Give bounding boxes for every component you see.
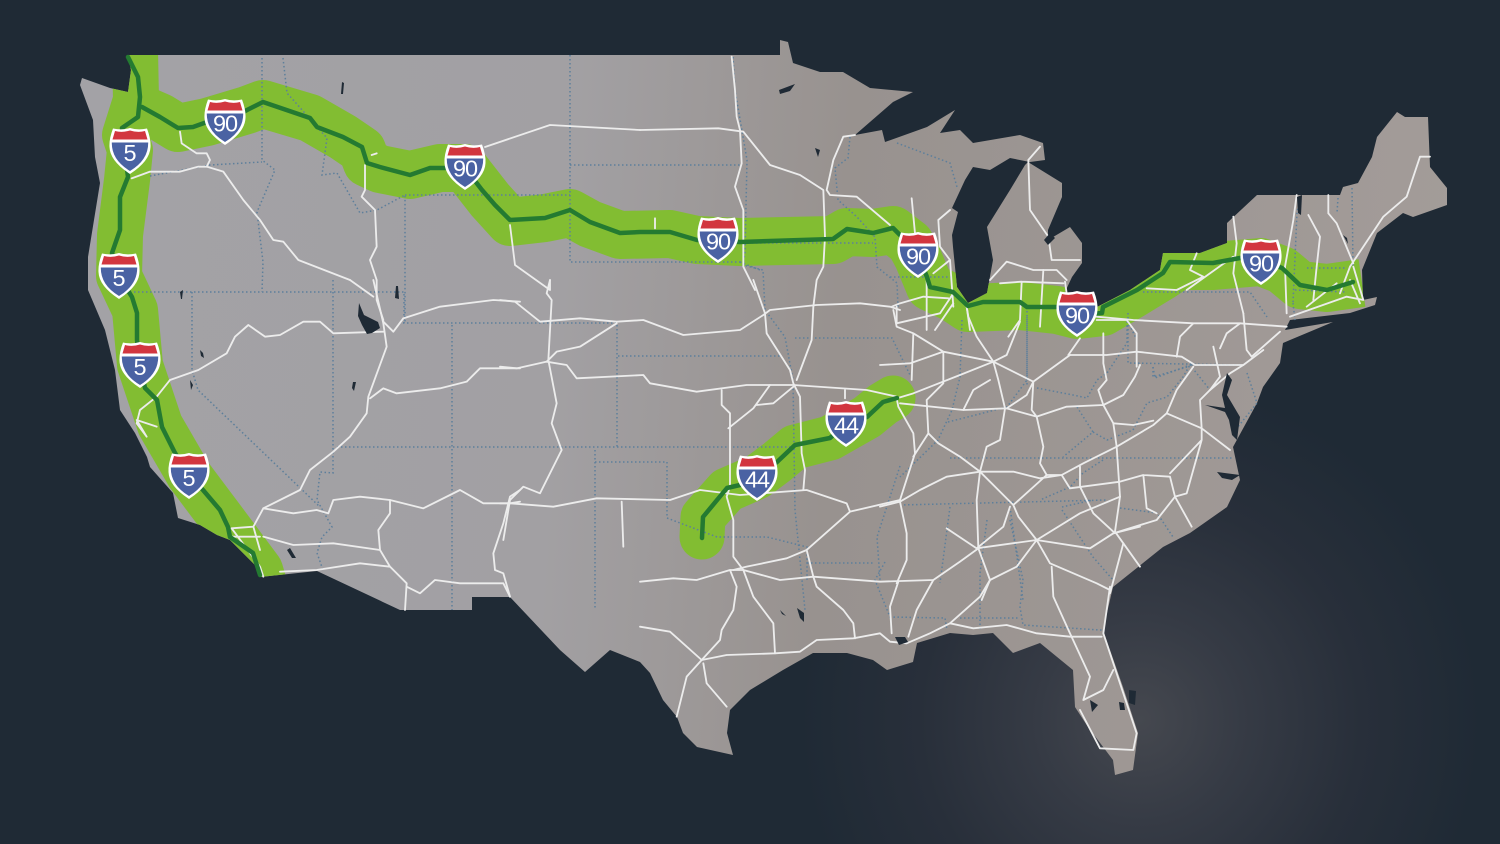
shield: I-90 South Dakota: 90 [706, 228, 731, 254]
shield: I-90 Montana: 90 [453, 156, 478, 182]
shield: I-5 Oregon: 5 [112, 265, 126, 291]
shield: I-44 Oklahoma [736, 455, 778, 501]
lakes and bays [180, 82, 1348, 712]
route line: I-5 [112, 57, 260, 575]
shield: I-90 Ohio [1056, 291, 1098, 337]
highways: east [880, 307, 1280, 600]
highways: gulf coast and florida [640, 548, 1137, 750]
land: contiguous United States [80, 40, 1447, 775]
highways: great lakes and northeast [1000, 157, 1430, 357]
shield: I-5 northern California [119, 342, 161, 388]
highways: northern plains [485, 125, 640, 290]
shield: I-90 Idaho: 90 [213, 110, 238, 136]
shield: I-90 South Dakota [697, 217, 739, 263]
shield: I-90 Idaho [204, 99, 246, 145]
highways: central plains [500, 280, 900, 570]
highways: upper midwest [640, 57, 1080, 330]
corridor band: I-90 [137, 104, 1362, 315]
shield: I-90 Wisconsin [897, 232, 939, 278]
shield: I-90 New York: 90 [1249, 250, 1274, 276]
shield: I-5 Oregon [98, 253, 140, 299]
background glow [760, 380, 1500, 844]
shield: I-44 Missouri [825, 401, 867, 447]
shield: I-90 Wisconsin: 90 [906, 244, 931, 270]
route line: I-44 [702, 398, 897, 538]
shield: I-90 Ohio: 90 [1065, 302, 1090, 328]
shield: I-44 Oklahoma: 44 [745, 466, 770, 492]
shield: I-90 Montana [444, 144, 486, 190]
shield: I-90 New York [1240, 239, 1282, 285]
route line: I-90 [142, 102, 1353, 315]
corridor band: I-44 [702, 398, 893, 537]
shield: I-5 southern California [168, 453, 210, 499]
shield: I-5 Washington [109, 128, 151, 174]
highways: southwest [137, 280, 520, 610]
shield: I-5 southern California: 5 [182, 465, 196, 491]
corridor band: I-5 [119, 50, 266, 590]
shield: I-44 Missouri: 44 [834, 412, 859, 438]
shield: I-5 northern California: 5 [133, 354, 147, 380]
shield: I-5 Washington: 5 [123, 140, 137, 166]
green corridors clipped to land [119, 50, 1362, 590]
highways: west [132, 132, 377, 280]
state borders [130, 55, 1353, 630]
